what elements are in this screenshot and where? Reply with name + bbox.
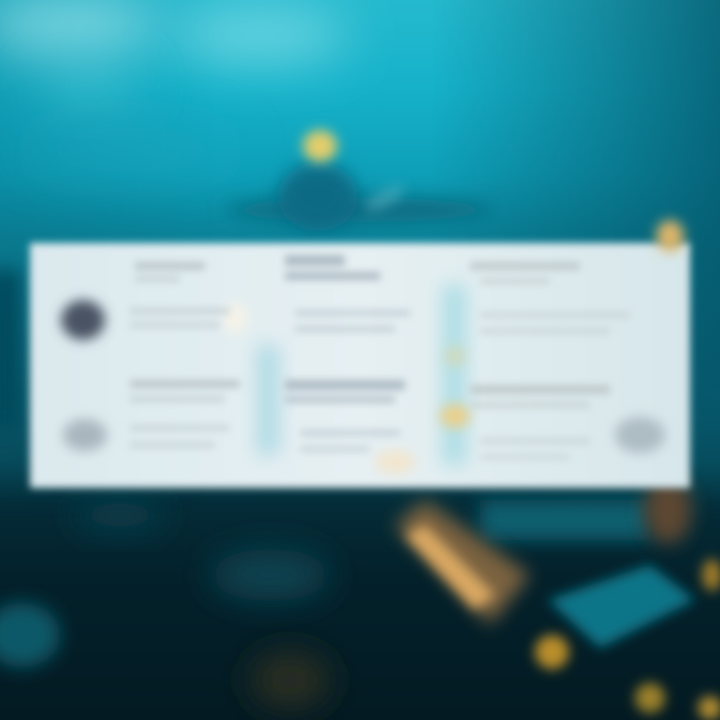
brown post — [644, 476, 692, 544]
orange diagonal stripe — [395, 500, 530, 625]
orange corner — [656, 220, 684, 252]
panel: document — [30, 220, 690, 488]
right column lower icon — [615, 417, 665, 453]
yellow lights — [535, 635, 569, 669]
panel base — [30, 243, 690, 488]
figure body — [278, 163, 358, 231]
silhouette figure above panel — [225, 130, 495, 231]
left column lower icon — [63, 419, 107, 451]
dark bottom details — [0, 270, 720, 720]
teal water band — [480, 500, 650, 540]
centre teal haze — [210, 549, 330, 601]
teal slab — [548, 565, 695, 648]
left column icon — [61, 300, 105, 340]
text blur: column 3 — [470, 262, 630, 460]
text blur: column 1 — [130, 262, 240, 448]
light clouds at top — [0, 0, 350, 175]
left side dark band — [0, 270, 20, 430]
light strut — [362, 180, 408, 216]
panel dividers — [256, 345, 280, 455]
yellow glow — [303, 130, 337, 162]
horizontal wings — [225, 198, 495, 222]
left teal block — [0, 603, 60, 667]
warm glows — [440, 404, 470, 428]
text blur: column 2 — [285, 255, 410, 452]
bottom brown haze — [250, 652, 330, 708]
